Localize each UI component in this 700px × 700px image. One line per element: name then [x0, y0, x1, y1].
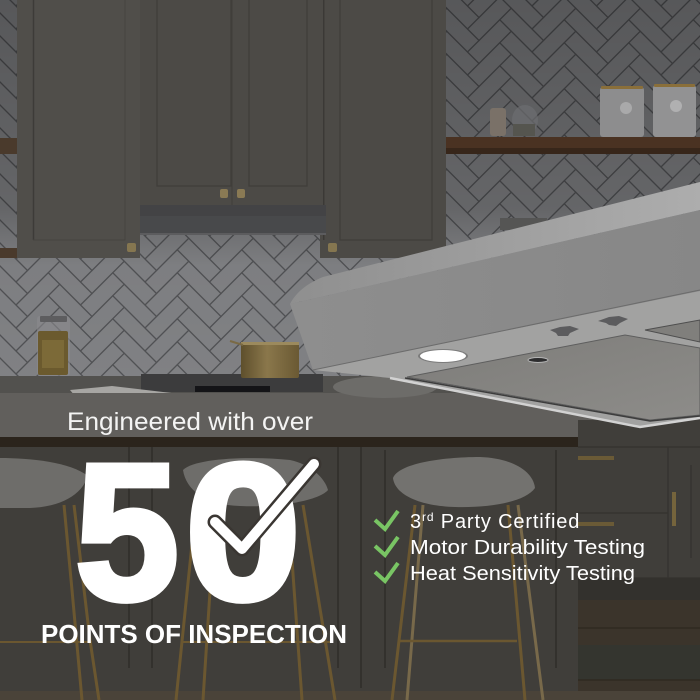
big number 50: 5 [75, 424, 179, 641]
gold pot [230, 341, 299, 378]
right wall shelf [446, 137, 700, 154]
small range hood under cabinets [140, 205, 326, 235]
item: third party certified [375, 510, 580, 533]
back counter [0, 376, 700, 394]
object behind hood [500, 218, 547, 230]
stool right [392, 457, 543, 700]
big number 50: 0 [185, 424, 301, 641]
hood light [418, 349, 468, 363]
stainless steel range hood [290, 182, 700, 427]
sensor hole [528, 358, 548, 362]
control knob right [598, 316, 628, 326]
bar stools [0, 457, 543, 700]
stool left [0, 458, 99, 700]
item: third party certified: Party Certified [434, 511, 580, 533]
island base [0, 437, 700, 700]
feature list [375, 510, 645, 585]
upper cabinets [17, 0, 446, 258]
control knob left [550, 326, 579, 336]
second filter [645, 320, 700, 342]
left wall shelf [0, 138, 17, 258]
cooktop [141, 374, 323, 392]
open magazine [70, 386, 180, 402]
subheading: points of inspection: POINTS OF INSPECTION [41, 621, 347, 649]
item: motor durability testing: Motor Durability Testing [410, 537, 645, 559]
stool center [176, 458, 335, 700]
lower right cabinets [578, 420, 700, 600]
big number 50 [75, 424, 301, 641]
icon: large check mark [215, 464, 314, 549]
canisters on shelf [490, 84, 696, 137]
hood front rim [390, 378, 700, 427]
hood front face [290, 210, 700, 370]
tiled wall [0, 0, 700, 380]
item: third party certified: rd [422, 510, 434, 524]
item: third party certified: 3 [410, 511, 422, 533]
hood shadow [333, 376, 437, 398]
hood seam [313, 290, 700, 370]
headline: engineered with over: Engineered with over [67, 408, 313, 436]
grease filter [407, 335, 700, 420]
hood top face [290, 182, 700, 304]
wood floor [578, 600, 700, 700]
hood underside [313, 290, 700, 427]
filter inner edge [405, 378, 700, 421]
spice jar [37, 316, 70, 376]
item: heat sensitivity testing: Heat Sensitivity Testing [410, 563, 635, 585]
island countertop [0, 393, 598, 437]
